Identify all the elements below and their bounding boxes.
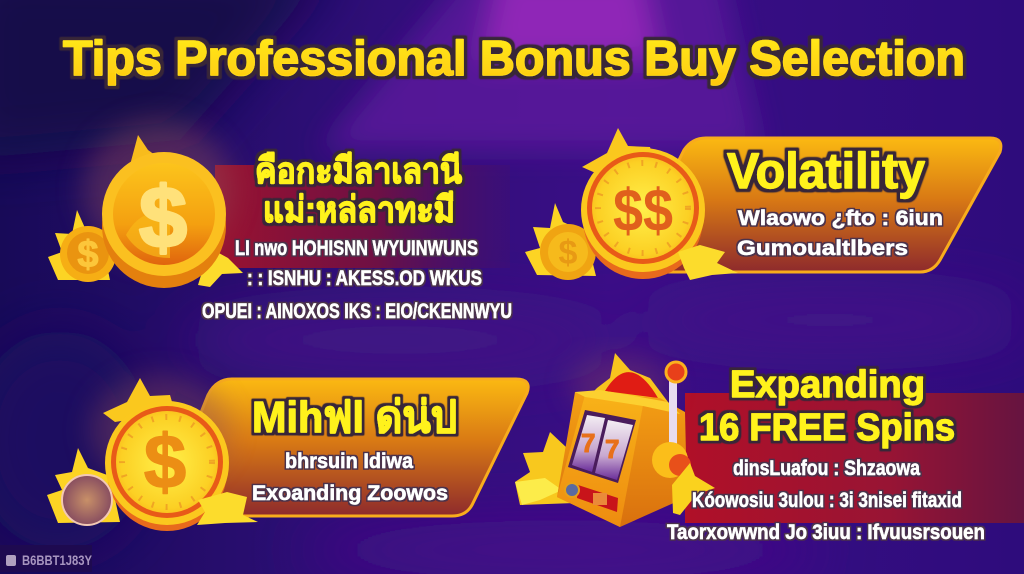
icon: clock coins: $ xyxy=(559,234,578,272)
panel: Volatility xyxy=(525,128,1001,280)
icon: gold coins: $ xyxy=(77,234,99,276)
body text: Kóowosiu 3ulou : 3i 3nisei fitaxid xyxy=(692,489,962,512)
body text: Exoanding Zoowos xyxy=(252,482,448,505)
heading xyxy=(699,364,955,449)
heading: Expanding xyxy=(730,364,925,406)
heading: Mihฟl ด่น่ป xyxy=(252,393,457,442)
body text xyxy=(667,457,985,544)
body text: dinsLuafou : Shzaowa xyxy=(733,457,920,480)
icon: gold coins: $ xyxy=(139,170,187,266)
panel: top-left coin tip xyxy=(48,120,512,323)
icon: clock coin and glass coin: $ xyxy=(144,420,186,505)
body text xyxy=(202,237,512,323)
orange banner xyxy=(190,379,528,516)
panel: bottom-left tip xyxy=(47,375,528,531)
heading: Volatility xyxy=(727,143,925,199)
body text: : : ISNHU : AKESS.OD WKUS xyxy=(247,267,482,290)
orange banner xyxy=(660,138,1001,272)
body text: Wlaowo ¿fto : 6iun xyxy=(738,207,943,230)
body text xyxy=(737,207,943,260)
body text: bhrsuin Idiwa xyxy=(285,450,413,473)
body text: LI nwo HOHISNN WYUINWUNS xyxy=(235,237,478,260)
icon: clock coin and glass coin xyxy=(47,375,258,531)
red ribbon xyxy=(215,165,510,268)
body text: Taorxowwnd Jo 3iuu : Ifvuusrsouen xyxy=(667,521,985,544)
icon: clock coins xyxy=(525,128,738,280)
body text xyxy=(252,450,448,505)
icon: clock coins: $$ xyxy=(613,177,673,244)
heading: คือกะมีลาเลานี xyxy=(255,150,462,191)
red ribbon xyxy=(685,393,1024,523)
heading xyxy=(255,150,462,230)
watermark xyxy=(0,545,93,572)
heading: แม่:หล่ลาทะมี xyxy=(263,189,455,230)
body text: OPUEI : AINOXOS IKS : EIO/CKENNWYU xyxy=(202,300,512,323)
watermark: B6BBT1J83Y xyxy=(22,552,93,568)
icon: slot machine: 7 xyxy=(605,434,619,464)
panel: Expanding free spins xyxy=(515,353,1024,544)
heading: 16 FREE Spins xyxy=(699,407,955,449)
icon: slot machine xyxy=(515,353,715,527)
icon: slot machine: 7 xyxy=(581,428,595,458)
icon: gold coins xyxy=(48,120,243,288)
body text: Gumoualtlbers xyxy=(737,237,908,260)
title: Tips Professional Bonus Buy Selection xyxy=(63,32,965,86)
